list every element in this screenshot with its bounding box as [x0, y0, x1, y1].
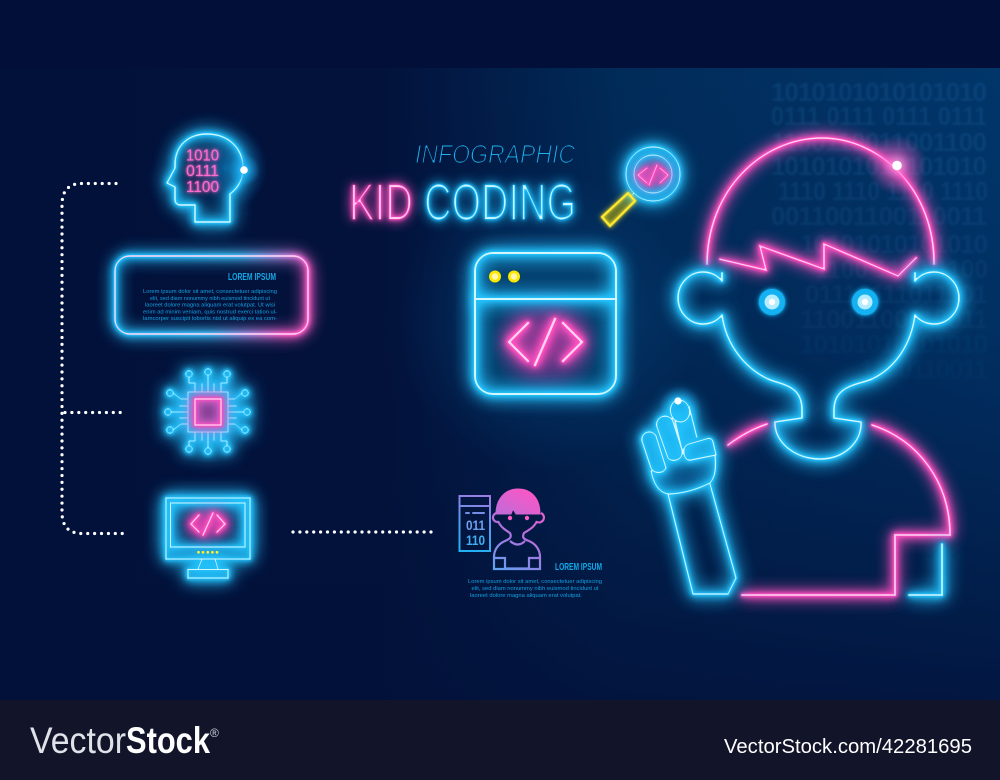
panel paragraph: enim ad minim veniam, quis nostrud exerci tation ul- [143, 310, 277, 316]
icon: desktop monitor with code [166, 498, 250, 578]
footer image id: VectorStock.com/42281695 [724, 736, 972, 758]
panel paragraph: Lorem ipsum dolor sit amet, consectetuer adipiscing [143, 289, 277, 295]
dotted connector: left bracket [62, 184, 123, 534]
binary code matrix: 1100110011 [860, 354, 988, 384]
binary code matrix: 0011001100110011 [771, 201, 987, 231]
kid heading: LOREM IPSUM [555, 561, 602, 573]
binary code matrix: 1100 1100 1100 [815, 254, 988, 284]
binary code matrix: 01110111011101 [805, 279, 988, 309]
icon: microchip [156, 360, 260, 464]
icon: head with binary: 1010 [186, 148, 219, 164]
kid figure [493, 489, 544, 569]
panel heading: LOREM IPSUM [228, 271, 276, 283]
panel paragraph: laoreet dolore magna aliquam erat volutpat. Ut wisi [145, 302, 275, 308]
title [349, 174, 576, 232]
kid paragraph: Lorem ipsum dolor sit amet, consectetuer adipiscing [468, 579, 602, 585]
binary code matrix: 10101010101010 [800, 229, 988, 259]
shirt cuff [909, 544, 942, 595]
footer logo [30, 720, 219, 761]
subtitle: INFOGRAPHIC [415, 139, 575, 169]
panel paragraph: elit, sed diam nonummy nibh euismod tincidunt ut [150, 296, 270, 302]
calculator [460, 496, 490, 551]
hair fringe [719, 244, 917, 276]
hair outline [707, 138, 934, 265]
footer logo: ® [210, 726, 219, 740]
kid paragraph: laoreet dolore magna aliquam erat volutpat. [470, 593, 582, 599]
panel paragraph: lamcorper suscipit lobortis nisl ut aliquip ex ea com- [143, 316, 277, 322]
calculator: 110 [466, 532, 485, 548]
binary code matrix: 1010101010101010 [771, 151, 987, 181]
footer logo: Stock [126, 720, 210, 761]
face and ears [678, 272, 959, 459]
icon: head with binary: 0111 [186, 163, 219, 180]
dotted connector: middle [65, 411, 123, 414]
hair flare [867, 135, 927, 195]
icon: magnifying glass [602, 147, 680, 226]
title: KID [349, 174, 413, 232]
shoulders and shirt [728, 424, 950, 595]
right eye [852, 289, 878, 315]
binary code matrix [771, 77, 988, 384]
footer logo: Vector [30, 720, 126, 761]
kid paragraph: elit, sed diam nonummy nibh euismod tincidunt ut [472, 586, 599, 592]
dotted connector: monitor to kid [293, 530, 433, 534]
icon: code window [475, 253, 616, 398]
binary code matrix: 10101010101010 [800, 329, 988, 359]
raised hand and arm [642, 386, 736, 594]
binary code matrix: 1010101010101010 [771, 77, 987, 107]
panel paragraph [143, 289, 277, 322]
calculator: 011 [466, 517, 485, 533]
binary code matrix: 11001100110011 [800, 304, 988, 334]
left eye [759, 289, 785, 315]
binary code matrix: 1100110011001100 [771, 127, 987, 157]
footer bar [0, 700, 1000, 780]
title: CODING [424, 174, 576, 232]
panel: text box [115, 256, 308, 334]
icon: head with binary [167, 126, 268, 222]
icon: small kid with calculator [460, 489, 602, 599]
kid paragraph [468, 579, 602, 599]
illustration: large neon kid [642, 135, 959, 595]
icon: head with binary: 1100 [186, 179, 219, 196]
